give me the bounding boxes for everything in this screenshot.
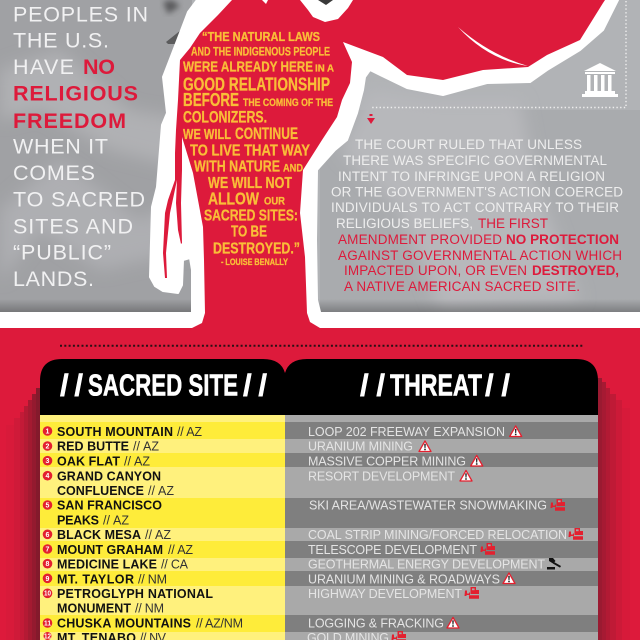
header: threat: // xyxy=(360,368,385,403)
numbered markers: 7 xyxy=(46,546,50,554)
text block: left statement: PEOPLES IN xyxy=(13,3,148,27)
threat descriptions: LOOP 202 FREEWAY EXPANSION xyxy=(308,425,505,439)
quote inside the fist: DESTROYED.” xyxy=(213,240,300,257)
dotted callout frame xyxy=(371,1,626,108)
text block: court ruling: OR THE GOVERNMENT'S ACTION COERCED xyxy=(331,184,623,200)
sacred site names: // CA xyxy=(161,558,189,572)
sacred site names: // NM xyxy=(135,602,164,616)
quote inside the fist: CONTINUE xyxy=(235,124,298,143)
numbered markers: 10 xyxy=(44,591,51,598)
text block: left statement: RELIGIOUS xyxy=(13,82,138,106)
header: threat: // xyxy=(485,368,510,403)
text block: court ruling: IMPACTED UPON, OR EVEN xyxy=(344,263,527,278)
numbered markers: 6 xyxy=(46,532,50,539)
text block: court ruling: A NATIVE AMERICAN SACRED SITE. xyxy=(344,279,580,294)
quote inside the fist: WE WILL xyxy=(183,127,231,143)
text block: left statement: TO SACRED xyxy=(13,188,145,212)
sacred site names: // AZ xyxy=(133,440,159,454)
sacred site names xyxy=(57,425,243,640)
numbered markers: 3 xyxy=(46,458,50,465)
quote inside the fist: WITH NATURE xyxy=(194,159,280,176)
threat type icons xyxy=(392,426,583,640)
sacred site names: GRAND CANYON xyxy=(57,469,161,483)
text block: court ruling: DESTROYED, xyxy=(532,263,619,278)
quote inside the fist: OUR xyxy=(264,195,285,207)
sacred site names: // AZ xyxy=(124,454,150,468)
threat descriptions: LOGGING & FRACKING xyxy=(308,616,444,630)
text block: court ruling xyxy=(331,137,623,294)
quote inside the fist: TO BE xyxy=(231,224,267,241)
quote inside the fist: - LOUISE BENALLY xyxy=(221,257,288,267)
numbered markers: 5 xyxy=(46,502,50,510)
threat descriptions: RESORT DEVELOPMENT xyxy=(308,469,455,483)
sacred site names: SAN FRANCISCO xyxy=(57,499,162,513)
text block: left statement: FREEDOM xyxy=(13,109,126,133)
text block: court ruling: THE COURT RULED THAT UNLESS xyxy=(355,137,582,152)
quote inside the fist: WE WILL NOT xyxy=(208,175,292,192)
threat descriptions: GEOTHERMAL ENERGY DEVELOPMENT xyxy=(308,558,545,572)
header: threat: THREAT xyxy=(390,368,482,403)
illustration: raised fist with white outline xyxy=(150,0,618,331)
threat descriptions xyxy=(307,425,567,640)
quote inside the fist: THE COMING OF THE xyxy=(243,97,333,109)
text block: left statement: WHEN IT xyxy=(13,135,108,159)
quote inside the fist: AND THE INDIGENOUS PEOPLE xyxy=(191,44,330,58)
sacred site names: // AZ/NM xyxy=(196,616,243,630)
threat descriptions: HIGHWAY DEVELOPMENT xyxy=(308,587,462,601)
quote inside the fist: GOOD RELATIONSHIP xyxy=(183,74,330,95)
text block: court ruling: RELIGIOUS BELIEFS, xyxy=(336,216,473,231)
text block: court ruling: NO PROTECTION xyxy=(506,232,619,247)
sacred site names: // AZ xyxy=(145,528,171,542)
threat descriptions: COAL STRIP MINING/FORCED RELOCATION xyxy=(308,528,567,542)
quote inside the fist xyxy=(183,30,334,267)
quote inside the fist: ALLOW xyxy=(208,188,259,208)
threat descriptions: URANIUM MINING xyxy=(308,440,413,454)
sacred site names: CHUSKA MOUNTAINS xyxy=(57,616,191,630)
sacred site names: // AZ xyxy=(168,543,193,557)
dotted divider above table xyxy=(60,345,583,347)
text block: court ruling: AMENDMENT PROVIDED xyxy=(338,232,502,247)
header: sacred site: // xyxy=(60,368,83,403)
quote inside the fist: “THE NATURAL LAWS xyxy=(202,30,320,44)
text block: left statement: NO xyxy=(83,55,115,79)
text block: left statement: COMES xyxy=(13,161,95,185)
text block: left statement: LANDS. xyxy=(13,267,94,291)
sacred site names: OAK FLAT xyxy=(57,454,120,468)
quote inside the fist: TO LIVE THAT WAY xyxy=(190,143,310,160)
numbered markers xyxy=(43,426,52,640)
text block: court ruling: INTENT TO INFRINGE UPON A RELIGION xyxy=(338,169,605,184)
table row bands: threat column xyxy=(285,415,598,640)
quote inside the fist: WERE ALREADY HERE xyxy=(183,59,313,76)
text block: court ruling: THE FIRST xyxy=(478,216,548,231)
sacred site names: MOUNT GRAHAM xyxy=(57,543,163,557)
quote inside the fist: SACRED SITES: xyxy=(204,208,298,225)
sacred site names: SOUTH MOUNTAIN xyxy=(57,425,173,439)
sacred site names: // AZ xyxy=(148,484,174,498)
text block: left statement: “PUBLIC” xyxy=(13,240,111,264)
sacred site names: MONUMENT xyxy=(57,602,131,616)
text block: left statement: SITES AND xyxy=(13,214,133,238)
table drop shadow xyxy=(6,378,630,640)
table row bands: sacred site column xyxy=(40,415,285,640)
quote inside the fist: AND xyxy=(283,163,303,175)
quote inside the fist: COLONIZERS. xyxy=(183,108,267,127)
numbered markers: 1 xyxy=(46,428,50,436)
text block: court ruling: THERE WAS SPECIFIC GOVERNMENTAL xyxy=(343,153,607,168)
sacred site names: MT. TAYLOR xyxy=(57,572,134,586)
sacred site names: MEDICINE LAKE xyxy=(57,558,157,572)
numbered markers: 11 xyxy=(44,620,51,627)
sacred site names: BLACK MESA xyxy=(57,528,141,542)
threat descriptions: URANIUM MINING & ROADWAYS xyxy=(308,572,500,586)
icon: courthouse xyxy=(582,63,618,97)
threat descriptions: MASSIVE COPPER MINING xyxy=(308,454,466,468)
text block: left statement: THE U.S. xyxy=(13,29,109,53)
numbered markers: 2 xyxy=(46,444,50,450)
quote inside the fist: BEFORE xyxy=(183,89,239,110)
numbered markers: 9 xyxy=(46,576,50,583)
text block: court ruling: AGAINST GOVERNMENTAL ACTION WHICH xyxy=(338,248,622,263)
numbered markers: 8 xyxy=(46,561,50,568)
threat descriptions: SKI AREA/WASTEWATER SNOWMAKING xyxy=(309,499,547,513)
numbered markers: 4 xyxy=(46,473,50,480)
sacred site names: // NM xyxy=(138,572,167,586)
sacred site names: PETROGLYPH NATIONAL xyxy=(57,587,213,601)
text block: left statement xyxy=(13,3,148,291)
sacred site names: // AZ xyxy=(177,425,202,439)
white band under gray panel xyxy=(0,312,640,328)
threat descriptions: TELESCOPE DEVELOPMENT xyxy=(308,543,477,557)
sacred site names: RED BUTTE xyxy=(57,440,129,454)
sacred site names: // AZ xyxy=(103,513,129,527)
text block: left statement: HAVE xyxy=(13,55,74,79)
icon: red pointer triangle xyxy=(367,114,375,124)
header: sacred site: // xyxy=(243,368,267,403)
text block: court ruling: INDIVIDUALS TO ACT CONTRARY TO THEIR xyxy=(331,200,619,215)
header: sacred site: SACRED SITE xyxy=(88,368,238,403)
quote inside the fist: IN A xyxy=(315,64,334,75)
panel: gray top background xyxy=(0,0,640,312)
table header xyxy=(40,359,598,415)
sacred site names: PEAKS xyxy=(57,513,99,527)
sacred site names: CONFLUENCE xyxy=(57,484,144,498)
